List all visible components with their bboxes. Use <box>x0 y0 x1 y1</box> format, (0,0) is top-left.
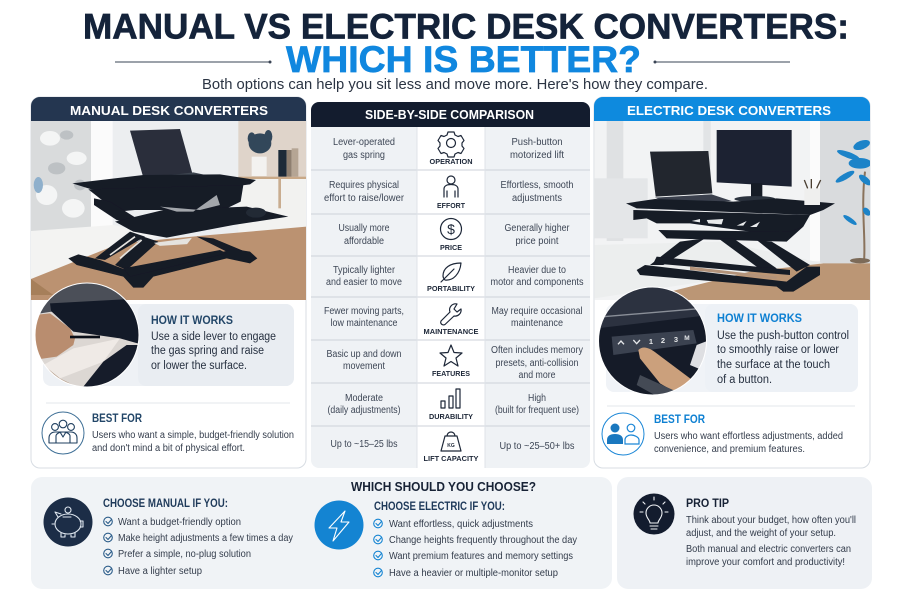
how it works text: or lower the surface. <box>151 360 247 372</box>
manual list: Have a lighter setup <box>118 566 203 577</box>
panel: side-by-side comparison <box>311 102 590 468</box>
row: durability: (built for frequent use) <box>495 405 579 416</box>
photo: push-button close-up: M <box>684 335 690 342</box>
row: features: movement <box>343 361 385 372</box>
row: effort <box>324 176 574 210</box>
electric list: Want premium features and memory settings <box>389 551 573 562</box>
title: WHICH IS BETTER? <box>286 39 641 80</box>
how it works text: the surface at the touch <box>717 359 830 371</box>
panel: manual desk converters <box>30 97 307 468</box>
row: features: Basic up and down <box>326 349 402 360</box>
row: portability <box>326 263 584 293</box>
row: lift capacity: Up to ~25–50+ lbs <box>500 441 574 452</box>
photo: push-button close-up: 1 <box>649 337 653 346</box>
electric list: Have a heavier or multiple-monitor setup <box>389 568 559 579</box>
row: effort: Effortless, smooth <box>500 180 574 191</box>
row: features <box>326 345 583 381</box>
manual list: CHOOSE MANUAL IF YOU: <box>103 498 228 510</box>
row: maintenance: low maintenance <box>330 318 398 329</box>
row: durability: High <box>528 393 546 404</box>
row: operation: Push-button <box>512 137 562 148</box>
row: durability: Moderate <box>345 393 383 404</box>
row: maintenance: Fewer moving parts, <box>324 306 404 317</box>
how it works box <box>138 304 294 386</box>
row: effort: EFFORT <box>437 201 465 210</box>
how it works text: Use the push-button control <box>717 330 849 342</box>
title: MANUAL VS ELECTRIC DESK CONVERTERS: <box>83 8 849 46</box>
row: effort: Requires physical <box>329 180 399 191</box>
row: portability: PORTABILITY <box>427 284 475 293</box>
icon: light bulb <box>634 494 674 534</box>
row: effort: effort to raise/lower <box>324 193 405 204</box>
manual riser frame <box>68 174 288 288</box>
panel: which should you choose <box>31 477 612 589</box>
row: price: $ <box>447 221 455 237</box>
best for text: convenience, and premium features. <box>654 444 805 455</box>
row: lift capacity: Up to ~15–25 lbs <box>330 439 398 450</box>
electric list <box>374 501 577 579</box>
plant <box>836 140 870 264</box>
pro tip text: adjust, and the weight of your setup. <box>686 528 836 539</box>
pro tip text: Think about your budget, how often you'll <box>686 515 856 526</box>
best for text <box>654 414 843 455</box>
icon: piggy bank <box>44 498 92 546</box>
row: portability: Typically lighter <box>333 265 396 276</box>
pro tip text: PRO TIP <box>686 496 729 510</box>
row: operation: gas spring <box>343 150 385 161</box>
manual list <box>103 498 293 577</box>
row: operation: motorized lift <box>510 150 564 161</box>
heading: comparison: SIDE-BY-SIDE COMPARISON <box>365 107 534 122</box>
row: maintenance: maintenance <box>511 318 563 329</box>
photo: electric desk converter <box>594 121 873 302</box>
best for text: BEST FOR <box>92 413 143 425</box>
photo: manual desk converter <box>31 121 307 302</box>
row: features: Often includes memory <box>491 345 583 356</box>
row: price: Generally higher <box>504 223 570 234</box>
electric list: CHOOSE ELECTRIC IF YOU: <box>374 501 505 513</box>
electric riser frame <box>626 198 835 292</box>
row: portability: Heavier due to <box>508 265 566 276</box>
best for text <box>92 413 294 454</box>
row: features: and more <box>518 370 556 381</box>
row: maintenance: MAINTENANCE <box>424 327 478 336</box>
row: price: price point <box>516 236 559 247</box>
icon: two users <box>602 413 644 455</box>
best for text: BEST FOR <box>654 414 706 426</box>
title <box>83 8 849 80</box>
how it works text: the gas spring and raise <box>151 345 264 357</box>
row: price: Usually more <box>338 223 390 234</box>
laptop on manual riser <box>130 129 204 176</box>
screens on electric riser <box>650 130 792 205</box>
row: features: FEATURES <box>432 369 470 378</box>
row: lift capacity <box>330 432 574 463</box>
pro tip text: improve your comfort and productivity! <box>686 557 845 568</box>
row: effort: adjustments <box>512 193 562 204</box>
row: price <box>338 218 570 252</box>
best for text: Users who want a simple, budget-friendly solution <box>92 430 294 441</box>
row: lift capacity: LIFT CAPACITY <box>424 454 478 463</box>
row: durability <box>328 389 579 421</box>
how it works text: to smoothly raise or lower <box>717 344 839 356</box>
row: lift capacity: KG <box>447 443 455 449</box>
row: durability: (daily adjustments) <box>328 405 400 416</box>
row: durability: DURABILITY <box>429 412 473 421</box>
electric list: Change heights frequently throughout the day <box>389 535 577 546</box>
best for text: and don't mind a bit of physical effort. <box>92 443 245 454</box>
heading: manual: MANUAL DESK CONVERTERS <box>70 103 268 118</box>
panel: pro tip <box>617 477 872 589</box>
photo: push-button close-up: 2 <box>661 336 665 345</box>
how it works backing <box>43 304 294 386</box>
how it works text <box>151 315 276 372</box>
how it works backing <box>606 304 858 392</box>
panel: electric desk converters <box>594 97 873 468</box>
row: operation: Lever-operated <box>333 137 395 148</box>
row: features: presets, anti-collision <box>496 358 578 369</box>
electric list: Want effortless, quick adjustments <box>389 519 533 530</box>
row: operation: OPERATION <box>430 157 472 166</box>
how it works text: of a button. <box>717 374 772 386</box>
how it works text <box>717 313 849 386</box>
photo: push-button close-up <box>599 288 706 394</box>
row: operation <box>333 132 564 166</box>
pro tip text: Both manual and electric converters can <box>686 544 851 555</box>
manual list: Make height adjustments a few times a day <box>118 533 293 544</box>
row: price: affordable <box>344 236 384 247</box>
manual list: Want a budget-friendly option <box>118 517 241 528</box>
icon: lightning bolt <box>314 500 364 550</box>
row: portability: and easier to move <box>326 277 402 288</box>
how it works text: HOW IT WORKS <box>151 315 233 327</box>
row: portability: motor and components <box>490 277 584 288</box>
icon: group of users <box>42 412 84 454</box>
how it works text: HOW IT WORKS <box>717 313 802 325</box>
how it works box <box>705 304 858 392</box>
subtitle: Both options can help you sit less and move more. Here's how they compare. <box>202 77 708 93</box>
pro tip text <box>686 496 856 568</box>
photo: push-button close-up: 3 <box>674 335 678 344</box>
best for text: Users who want effortless adjustments, added <box>654 431 843 442</box>
manual list: Prefer a simple, no-plug solution <box>118 549 251 560</box>
row: price: PRICE <box>440 243 462 252</box>
heading: which should you choose: WHICH SHOULD YOU CHOOSE? <box>351 480 536 494</box>
photo: lever close-up <box>36 284 138 386</box>
row: maintenance <box>324 304 582 336</box>
heading: electric: ELECTRIC DESK CONVERTERS <box>627 103 831 118</box>
row: maintenance: May require occasional <box>492 306 582 317</box>
how it works text: Use a side lever to engage <box>151 331 276 343</box>
